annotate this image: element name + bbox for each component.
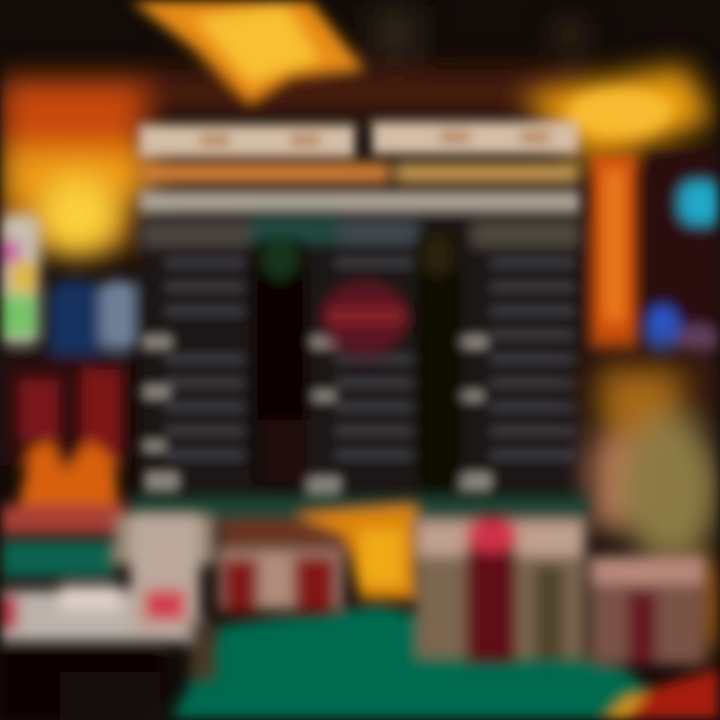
small red gifts bbox=[218, 548, 343, 613]
dark table panel bbox=[140, 215, 585, 498]
large gift boxes bbox=[415, 517, 705, 665]
table rows bbox=[165, 258, 575, 460]
floor band bbox=[130, 495, 590, 600]
dark dividing figures bbox=[254, 232, 460, 490]
foreground dark bottom left bbox=[0, 648, 160, 720]
green table bbox=[0, 515, 650, 720]
right tan figure bbox=[585, 350, 720, 650]
right ceiling light bbox=[520, 65, 715, 160]
subtitle band bbox=[140, 162, 580, 184]
chips and white stacks bbox=[0, 515, 215, 680]
left figures bbox=[0, 280, 138, 535]
caption line bbox=[140, 191, 580, 213]
right ceiling light core bbox=[568, 88, 672, 136]
orange pillar bbox=[590, 155, 638, 350]
ceiling glow: left orange band bbox=[0, 5, 590, 250]
blue sign bbox=[644, 306, 680, 354]
orange centre strip bbox=[295, 505, 420, 600]
header tints bbox=[140, 215, 580, 248]
bottom right red corner bbox=[600, 668, 720, 720]
panel background bbox=[140, 218, 585, 490]
red circle emblem bbox=[321, 280, 409, 356]
title line bbox=[140, 122, 578, 157]
ceiling star light bbox=[130, 0, 365, 105]
cyan sign bbox=[680, 182, 720, 224]
title block bbox=[140, 122, 580, 213]
right wall bbox=[644, 150, 720, 354]
bright row markers bbox=[142, 335, 492, 498]
left rainbow machine bbox=[0, 215, 40, 345]
left wall lamp bbox=[36, 175, 120, 255]
